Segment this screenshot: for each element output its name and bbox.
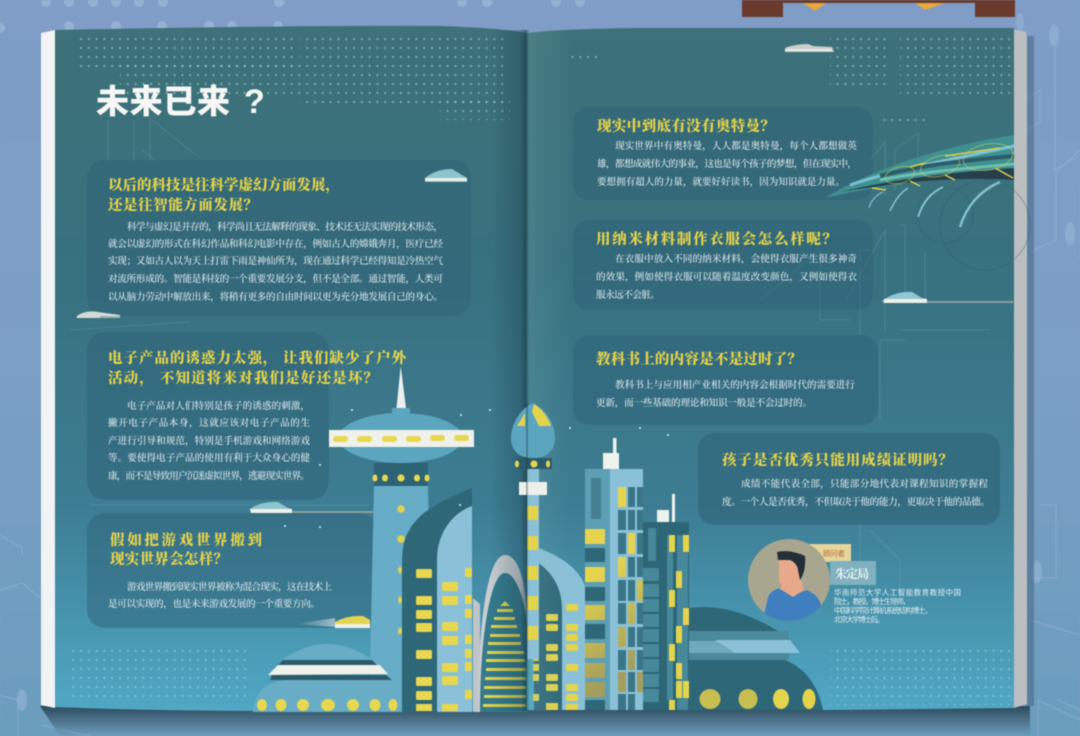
portrait	[748, 539, 830, 625]
body text: 的效果，例如使得衣服可以随着温度改变颜色，又例如使得衣	[596, 271, 857, 283]
heading: 活动， 不知道将来对我们是好还是坏？	[108, 369, 378, 388]
heading: 以后的科技是往科学虚幻方面发展，	[108, 176, 340, 195]
body text: 就会以虚幻的形式在科幻作品和科幻电影中存在，例如古人的嫦娥奔月，医疗已经	[108, 238, 443, 250]
body text	[108, 581, 332, 610]
fold shadow	[490, 30, 570, 711]
panel: grades	[698, 433, 1000, 525]
panel: nano clothes	[573, 220, 873, 310]
body text	[597, 140, 857, 188]
stars	[284, 409, 669, 528]
building: right dome	[689, 607, 823, 710]
body text: 更新，而一些基础的理论和知识一般是不会过时的。	[596, 397, 812, 409]
icon: hyperloop tube	[825, 135, 1030, 270]
body text: 要想拥有超人的力量，就要好好读书，因为知识就是力量。	[597, 176, 845, 188]
heading	[108, 176, 340, 214]
heading: 孩子是否优秀只能用成绩证明吗？	[722, 451, 953, 469]
body text: 以从脑力劳动中解放出来，将稍有更多的自由时间以更为充分地发展自己的身心。	[108, 291, 443, 303]
heading: 电子产品的诱惑力太强， 让我们缺少了户外	[108, 349, 408, 368]
building: tall grid tower	[585, 438, 643, 710]
icon: train right middle	[882, 292, 1013, 303]
panel: game world	[87, 513, 377, 628]
heading: 现实中到底有没有奥特曼？	[597, 117, 775, 135]
icon: train lower left	[250, 502, 373, 513]
body text: 现实世界中有奥特曼，人人都是奥特曼，每个人都想做英	[615, 140, 857, 152]
panel: Ultraman	[573, 107, 873, 200]
panel: science fiction or AI	[87, 160, 471, 316]
title: ?	[244, 83, 265, 121]
bio: 中国科学院计算机系统结构博士，	[834, 605, 932, 615]
bio: 北京大学博士后。	[834, 614, 884, 624]
brown frame at the top edge	[742, 0, 1015, 17]
body text: 产进行引导和规范，特别是手机游戏和网络游戏	[108, 435, 310, 447]
bio: 华南师范大学人工智能教育教授中国	[834, 587, 961, 597]
heading	[110, 531, 262, 568]
body text: 对流所形成的。智能是科技的一个重要发展分支，但不是全部。通过智能，人类可	[108, 273, 443, 285]
tag: role	[805, 544, 851, 562]
body text	[722, 478, 990, 508]
name plate	[830, 561, 876, 585]
body text: 游戏世界搬到现实世界被称为混合现实，这在技术上	[127, 581, 332, 593]
body text: 雄，都想成就伟大的事业，这也是每个孩子的梦想，但在现实中，	[597, 158, 857, 170]
body text: 康，而不是导致用户沉迷虚拟世界，逃避现实世界。	[108, 470, 310, 482]
building: left dome	[253, 644, 402, 712]
body text: 成绩不能代表全部，只能部分地代表对课程知识的掌握程	[741, 478, 988, 490]
book shadow	[40, 706, 1030, 736]
body text: 服永远不会脏。	[596, 289, 660, 301]
icon: train upper right	[785, 44, 834, 52]
heading: 假如把游戏世界搬到	[110, 531, 262, 549]
heading	[108, 349, 408, 388]
body text: 实现；又如古人以为天上打雷下雨是神仙所为，现在通过科学已经得知是冷热空气	[108, 255, 443, 267]
icon: train left margin	[76, 311, 120, 318]
body text: 度。一个人是否优秀，不但取决于他的能力，更取决于他的品德。	[722, 496, 990, 508]
body text	[108, 400, 310, 482]
right page	[527, 28, 1014, 710]
body text: 在衣服中放入不同的纳米材料，会使得衣服产生很多神奇	[615, 253, 857, 265]
building: right curved tower	[533, 546, 589, 710]
bio	[834, 587, 961, 624]
body text	[108, 221, 443, 303]
tag: role: 顾问者	[823, 549, 846, 558]
body text: 科学与虚幻是并存的，科学尚且无法解释的现象、技术还无法实现的技术形态，	[127, 221, 443, 233]
body text: 撇开电子产品本身，这就应该对电子产品的生	[108, 417, 310, 429]
faint circuit lines on page	[70, 118, 1000, 650]
body text	[596, 379, 855, 409]
name plate: 朱定局	[835, 566, 869, 581]
heading: 还是往智能方面发展？	[108, 196, 258, 214]
body text: 是可以实现的，也是未来游戏发展的一个重要方向。	[108, 598, 320, 610]
heading: 用纳米材料制作衣服会怎么样呢？	[596, 230, 837, 248]
building: minaret	[511, 403, 555, 659]
body text: 等。要使得电子产品的使用有利于大众身心的健	[108, 452, 310, 464]
bio: 院士，教授，博士生导师，	[834, 596, 910, 606]
author block	[748, 539, 961, 625]
building: curved tower	[402, 488, 472, 712]
icon: yellow train	[295, 616, 370, 628]
heading: 现实世界会怎样？	[110, 550, 228, 568]
icon: train upper left	[425, 169, 467, 182]
body text: 教科书上与应用相产业相关的内容会根据时代的需要进行	[615, 379, 855, 391]
body text	[596, 253, 857, 301]
title: 未来已来	[96, 83, 230, 120]
body text: 电子产品对人们特别是孩子的诱惑的刺激，	[127, 400, 310, 412]
heading: 教科书上的内容是不是过时了？	[596, 350, 802, 368]
building: saucer tower	[329, 366, 474, 712]
building: short dark tower	[643, 494, 689, 710]
building: arch tower	[473, 555, 527, 712]
panel: electronic products	[87, 332, 408, 500]
panel: textbooks	[573, 335, 878, 425]
dot texture	[70, 32, 1010, 705]
left page	[55, 26, 527, 711]
